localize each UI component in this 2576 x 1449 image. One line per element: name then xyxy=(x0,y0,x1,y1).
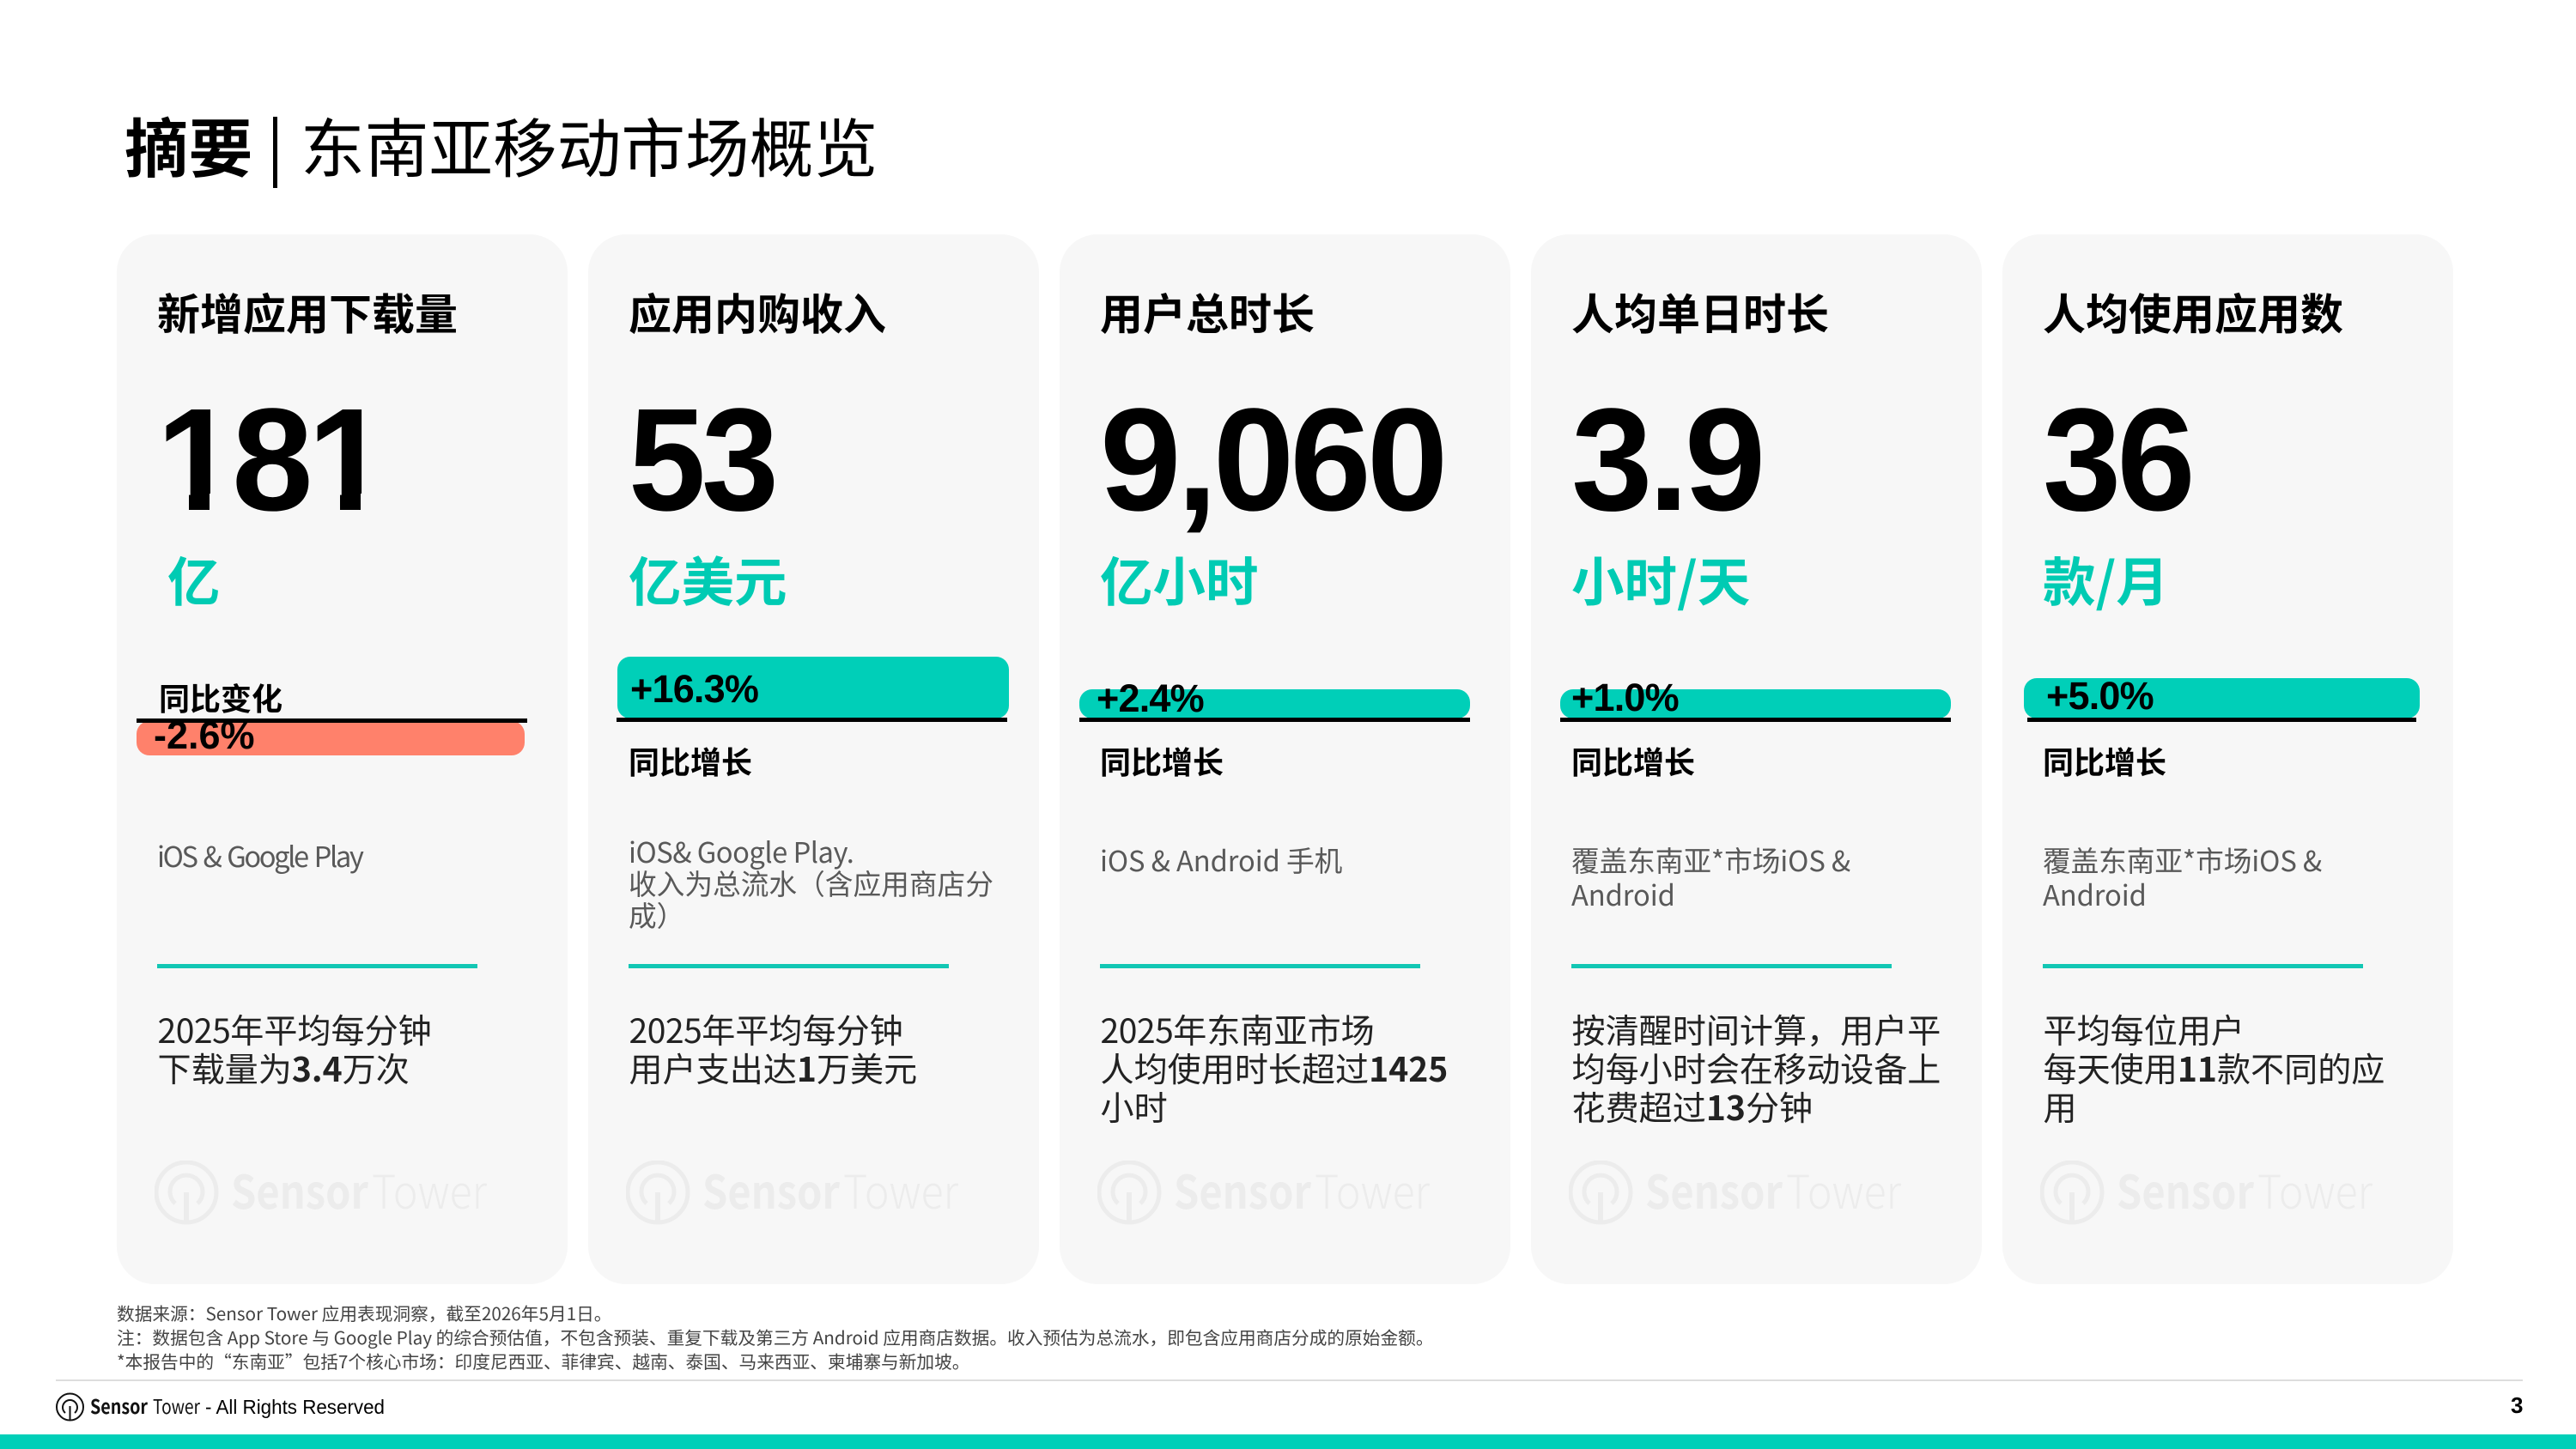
divider rule xyxy=(1100,964,1420,968)
watermark xyxy=(155,1161,488,1224)
title: 摘要 xyxy=(125,97,252,191)
divider rule xyxy=(2043,964,2363,968)
description xyxy=(1571,1005,1941,1131)
platform note: iOS& Google Play. xyxy=(629,831,854,871)
heading: 人均单日时长 xyxy=(1571,281,1829,343)
panel: new app downloads xyxy=(117,234,568,1284)
description: 均每小时会在移动设备上 xyxy=(1571,1044,1941,1092)
big number: 3.9 xyxy=(1571,379,1761,542)
unit: 亿美元 xyxy=(629,540,787,616)
unit: 款/月 xyxy=(2043,540,2169,616)
unit: 小时/天 xyxy=(1571,540,1750,616)
footer text: Tower xyxy=(153,1391,200,1420)
positive change bar xyxy=(2024,678,2420,718)
label: yoy growth: 同比增长 xyxy=(1100,738,1224,783)
change value: +2.4% xyxy=(1097,676,1204,720)
big number: 9,060 xyxy=(1100,379,1443,542)
negative change bar xyxy=(137,721,525,755)
heading: 人均使用应用数 xyxy=(2043,281,2343,343)
platform note: 覆盖东南亚*市场iOS & xyxy=(1571,840,1850,880)
watermark xyxy=(626,1161,959,1224)
platform note xyxy=(2043,840,2322,914)
platform note: iOS & Google Play xyxy=(157,835,362,876)
panel: daily hours per user xyxy=(1531,234,1982,1284)
footer text: Sensor xyxy=(90,1391,149,1420)
label: yoy growth: 同比增长 xyxy=(629,738,752,783)
description: 按清醒时间计算，用户平 xyxy=(1571,1005,1941,1053)
platform note: iOS & Android 手机 xyxy=(1100,840,1342,880)
footer brand xyxy=(56,1391,385,1422)
description: 用 xyxy=(2044,1082,2077,1131)
axis line xyxy=(2027,718,2416,722)
bottom accent bar xyxy=(0,1434,2576,1449)
divider rule xyxy=(629,964,949,968)
footnotes: *本报告中的“东南亚”包括7个核心市场：印度尼西亚、菲律宾、越南、泰国、马来西亚、柬埔寨与新加坡。 xyxy=(117,1348,969,1373)
description xyxy=(158,1005,432,1092)
watermark xyxy=(1569,1161,1902,1224)
panel: apps used per user xyxy=(2002,234,2453,1284)
description: 小时 xyxy=(1101,1082,1168,1131)
footnotes: 数据来源：Sensor Tower 应用表现洞察，截至2026年5月1日。 xyxy=(117,1300,611,1325)
change value: +1.0% xyxy=(1571,676,1679,719)
label: yoy growth: 同比增长 xyxy=(1571,738,1695,783)
footnotes xyxy=(117,1300,1434,1373)
label: yoy growth: 同比增长 xyxy=(2043,738,2166,783)
panel: total user hours xyxy=(1060,234,1510,1284)
description: 花费超过13分钟 xyxy=(1571,1082,1813,1131)
change value: +16.3% xyxy=(630,667,758,711)
big number: 181 xyxy=(156,379,383,542)
heading: 用户总时长 xyxy=(1100,281,1315,343)
panel: in-app purchase revenue xyxy=(588,234,1039,1284)
heading: 应用内购收入 xyxy=(629,281,886,343)
description: 每天使用11款不同的应 xyxy=(2044,1044,2385,1092)
platform note: Android xyxy=(1571,874,1675,914)
axis line xyxy=(137,718,527,723)
watermark xyxy=(1097,1161,1431,1224)
description: 2025年东南亚市场 xyxy=(1101,1005,1375,1053)
footer text: - All Rights Reserved xyxy=(205,1396,385,1418)
axis line xyxy=(617,718,1007,722)
label: yoy change: 同比变化 xyxy=(159,675,283,719)
icon: sensor tower logo xyxy=(57,1394,83,1421)
description: 2025年平均每分钟 xyxy=(629,1005,903,1053)
platform note: 成） xyxy=(629,894,684,935)
platform note: Android xyxy=(2043,874,2147,914)
description: 用户支出达1万美元 xyxy=(629,1044,917,1092)
description: 平均每位用户 xyxy=(2044,1005,2245,1053)
unit: 亿小时 xyxy=(1100,540,1259,616)
description: 2025年平均每分钟 xyxy=(158,1005,432,1053)
axis line xyxy=(1079,718,1470,722)
axis line xyxy=(1560,718,1951,722)
big number: 53 xyxy=(629,379,775,542)
platform note xyxy=(1571,840,1850,914)
platform note: 收入为总流水（含应用商店分 xyxy=(629,863,993,903)
heading: 新增应用下载量 xyxy=(157,281,458,343)
divider rule xyxy=(1571,964,1892,968)
positive change bar xyxy=(617,657,1009,718)
change value: +5.0% xyxy=(2046,674,2154,718)
big number: 36 xyxy=(2043,379,2191,542)
footnotes: 注：数据包含 App Store 与 Google Play 的综合预估值，不包含预装、重复下载及第三方 Android 应用商店数据。收入预估为总流水，即包含应用商店分成的原始金额。 xyxy=(117,1324,1434,1349)
title: 东南亚移动市场概览 xyxy=(301,97,878,191)
divider rule xyxy=(157,964,477,968)
change value: -2.6% xyxy=(154,713,255,757)
unit: 亿 xyxy=(167,540,221,616)
footer text xyxy=(90,1391,385,1420)
watermark xyxy=(2040,1161,2373,1224)
positive change bar xyxy=(1079,689,1470,718)
description: 下载量为3.4万次 xyxy=(158,1044,410,1092)
description xyxy=(1101,1005,1448,1131)
description: 人均使用时长超过1425 xyxy=(1101,1044,1448,1092)
platform note: 覆盖东南亚*市场iOS & xyxy=(2043,840,2322,880)
platform note xyxy=(629,831,993,935)
description xyxy=(2044,1005,2385,1131)
positive change bar xyxy=(1560,689,1951,718)
description xyxy=(629,1005,917,1092)
page number: 3 xyxy=(2511,1392,2523,1418)
